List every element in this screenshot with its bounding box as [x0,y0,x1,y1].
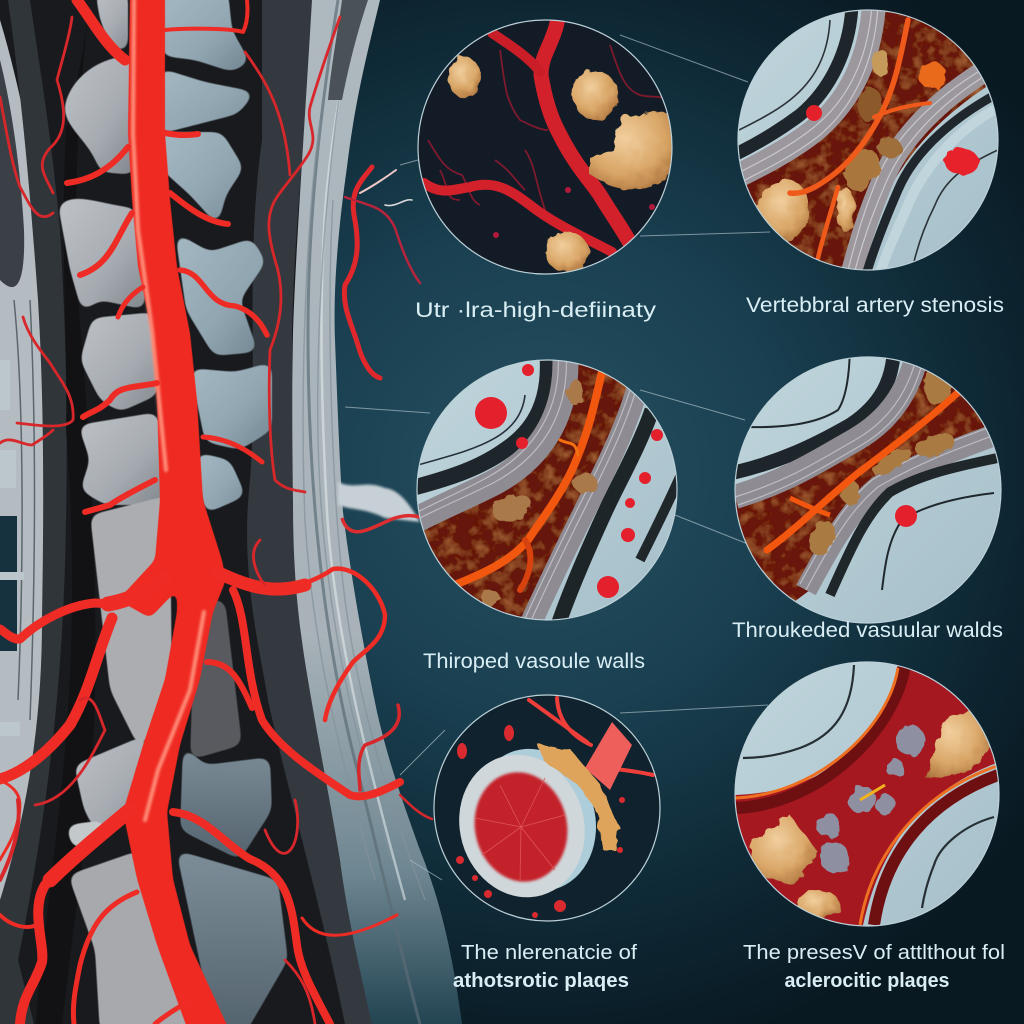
grey walls [738,10,995,270]
channel [736,370,984,601]
thin vessels [0,17,432,1024]
tan plaques [752,710,990,920]
plaques [480,379,597,606]
red channel [730,660,1005,930]
main vessels [424,23,631,252]
walls [412,350,683,625]
orange rims [735,668,1000,925]
panel: circle 6 atherosclerotic plaque [730,660,1005,930]
yellow sparks [860,785,885,800]
artery highlight [133,0,204,820]
red clots [475,364,663,598]
panel: circle 1 plaques on arteries [418,20,678,274]
channel [424,364,626,617]
large vessel [585,722,632,790]
label: circle 1: Utr ·lra-high-defiinaty [415,299,657,322]
orange artery [790,20,930,258]
right fascia band [292,0,462,1024]
red clot [895,505,917,527]
left fascia band [0,0,95,1024]
wall curves [743,665,994,908]
thin vessels [428,45,668,210]
panel: circle 3 thrombosed walls [412,350,683,630]
label: circle 5: athotsrotic plaqes [453,970,629,992]
wall lines [739,20,998,262]
side vessel [344,167,420,378]
dark tissue behind spine [0,0,440,1024]
spots [493,187,655,238]
textured dark strip right of spine [247,0,400,1024]
panel: circle 5 vessel cross-section [434,695,660,921]
label: circle 4: Throukeded vasuular walds [732,619,1003,642]
nerve vessel [342,516,420,532]
red clots [806,105,822,121]
walls [732,340,1002,595]
channel [746,12,986,267]
main artery [118,0,232,1024]
plaques [809,372,954,556]
artery branches [0,0,400,1024]
plaque on disc [538,745,619,850]
grey deposits [816,725,925,872]
label: circle 6: aclerocitic plaqes [784,970,950,992]
label: circle 3: Thiroped vasoule walls [423,650,645,673]
leader lines [345,35,770,880]
scattered clots [456,725,625,918]
orange artery [767,383,968,550]
label: circle 6: The presesV of attlthout fol [743,942,1005,964]
vessels above disc [529,698,653,775]
dark edges [735,665,998,925]
left nerve window [0,516,17,651]
vertebrae [58,0,288,1024]
label: circle 5: The nlerenatcie of [461,942,637,964]
label: circle 2: Vertebbral artery stenosis [746,294,1004,317]
nerve root stub [338,482,420,522]
orange artery [452,368,603,590]
plaque lumps [756,50,946,242]
panel: circle 2 vertebral stenosis [737,9,999,271]
panel: circle 4 thrombosed walls [730,340,1005,623]
spine illustration [0,0,462,1024]
disc [501,748,596,890]
plaques [447,57,678,272]
